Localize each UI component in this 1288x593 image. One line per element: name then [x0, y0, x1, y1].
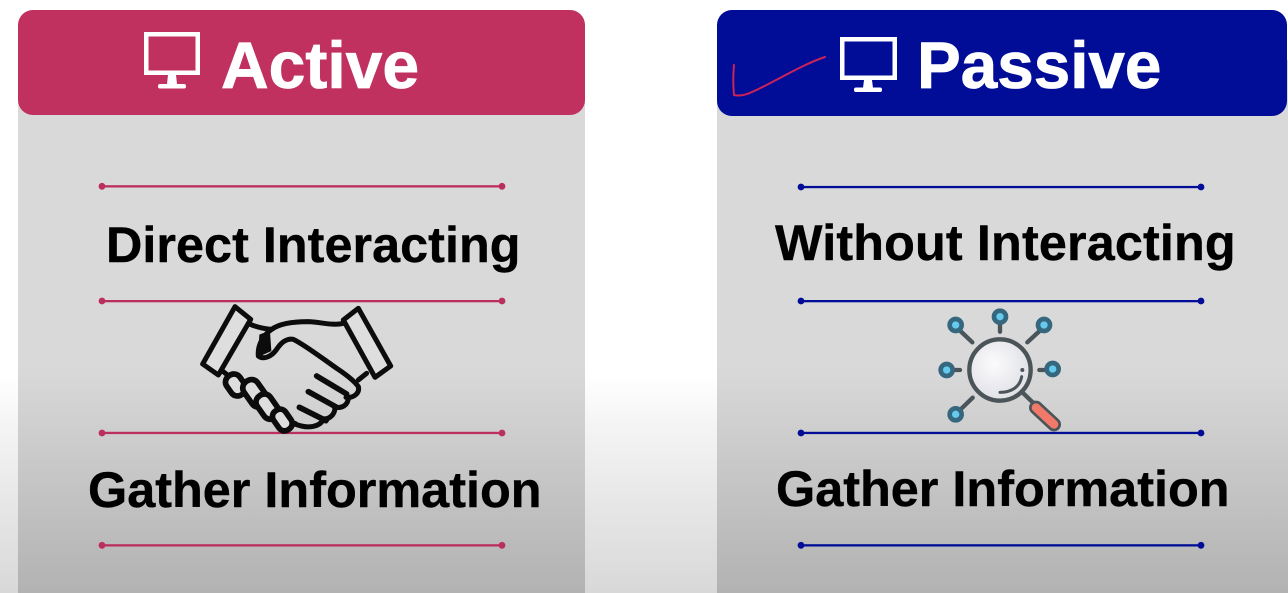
header: passive: [717, 10, 1287, 116]
panel body: passive: [717, 60, 1288, 593]
divider line 3: [99, 430, 505, 436]
divider line 2: [798, 298, 1204, 304]
text: Gather Information: Gather Information: [776, 460, 1230, 517]
text: Direct Interacting: Direct Interacting: [106, 216, 521, 273]
panel: passive: [717, 10, 1288, 593]
icon: magnifier network: [941, 311, 1059, 424]
panel body: active: [18, 60, 585, 593]
divider line 3: [798, 430, 1204, 436]
text: Gather Information: Gather Information: [88, 461, 542, 518]
header: active: [18, 10, 585, 115]
icon: monitor: [144, 32, 200, 88]
heading: Passive: Passive: [917, 29, 1161, 102]
divider line 4: [99, 542, 505, 549]
divider line 4: [798, 542, 1204, 549]
icon: monitor: [840, 37, 897, 92]
divider line 1: [99, 183, 505, 190]
text: Without Interacting: Without Interacting: [775, 214, 1236, 271]
divider line 2: [99, 298, 505, 304]
divider line 1: [798, 184, 1204, 190]
annotation: red pen stroke: [733, 57, 825, 96]
heading: Active: Active: [221, 28, 419, 102]
panel: active: [18, 10, 585, 593]
icon: handshake: [203, 307, 391, 433]
